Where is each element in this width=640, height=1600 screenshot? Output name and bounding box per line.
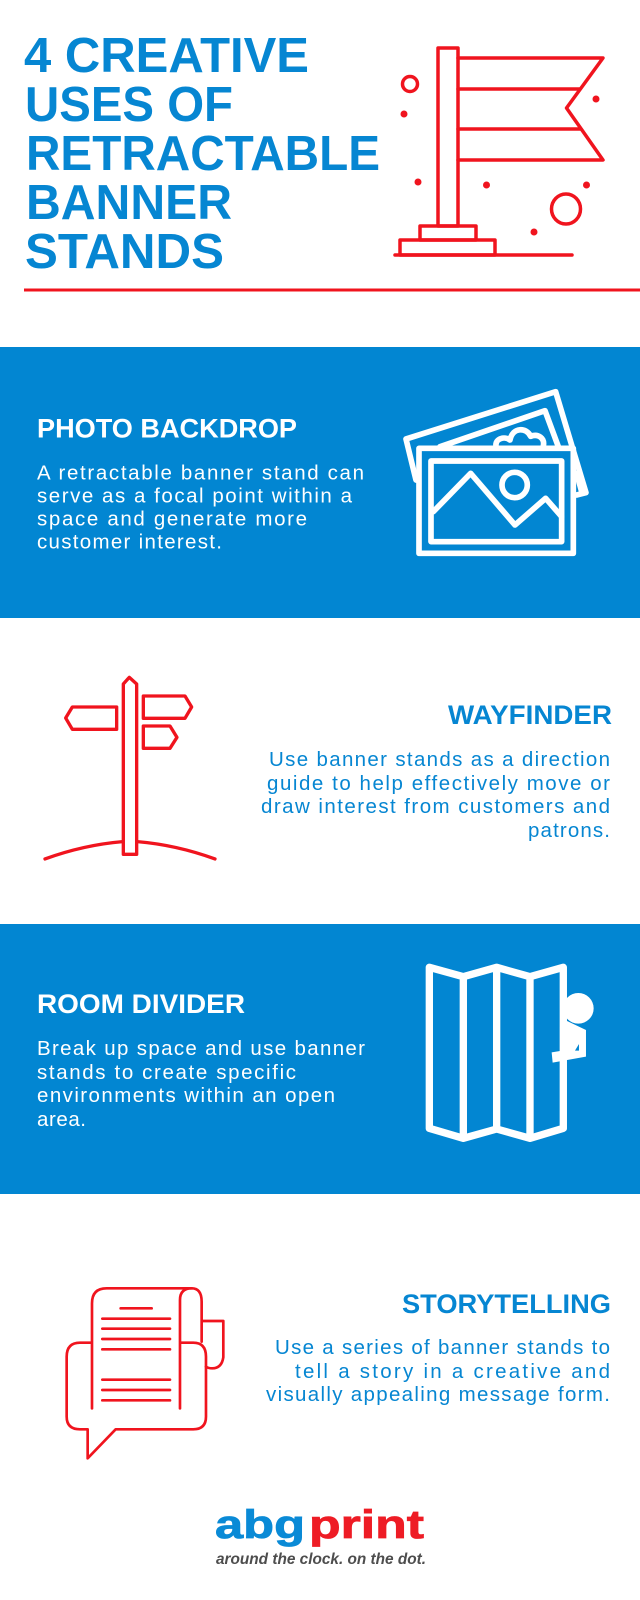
logo tagline: around the clock. on the dot. (216, 1551, 426, 1568)
text: wayfinder description: draw interest from customers and (261, 795, 610, 818)
icon: folding screen with person (429, 967, 594, 1138)
heading: storytelling: STORYTELLING (402, 1289, 611, 1319)
text: wayfinder description: patrons. (528, 819, 610, 842)
panel: room divider (0, 924, 640, 1194)
title: USES OF (25, 78, 233, 132)
logo: abgprint (215, 1503, 426, 1568)
logo: abgprint: abg (215, 1503, 305, 1547)
heading: wayfinder: WAYFINDER (448, 700, 612, 730)
red divider line (24, 288, 640, 292)
heading: photo backdrop: PHOTO BACKDROP (37, 414, 297, 444)
logo: abgprint: print (309, 1503, 424, 1547)
panel: photo backdrop (0, 347, 640, 618)
title: RETRACTABLE (26, 127, 380, 181)
text: room divider description: environments within an open (37, 1084, 335, 1107)
text: storytelling description: Use a series of banner stands to (275, 1336, 610, 1359)
text: photo backdrop description: space and generate more (37, 508, 307, 530)
icon: red scroll in speech bubble (67, 1288, 223, 1458)
text: storytelling description: tell a story in a creative and (295, 1360, 610, 1383)
text: storytelling description (266, 1336, 610, 1406)
text: room divider description (37, 1037, 365, 1131)
text: wayfinder description: guide to help effectively move or (267, 772, 610, 795)
text: room divider description: Break up space and use banner (37, 1037, 365, 1060)
text: room divider description: area. (37, 1108, 86, 1131)
heading: room divider: ROOM DIVIDER (37, 989, 245, 1019)
title: BANNER (26, 176, 232, 230)
title: 4 CREATIVE (24, 29, 309, 83)
icon: stacked photos (406, 392, 586, 553)
text: room divider description: stands to create specific (37, 1061, 296, 1084)
text: wayfinder description (261, 748, 610, 842)
text: photo backdrop description: customer interest. (37, 530, 222, 554)
text: photo backdrop description (37, 462, 364, 554)
text: wayfinder description: Use banner stands as a direction (269, 748, 610, 771)
icon: red flag on stand (395, 48, 603, 255)
title: STANDS (25, 225, 224, 279)
text: photo backdrop description: serve as a focal point within a (37, 484, 353, 508)
icon: red signpost (45, 677, 215, 859)
text: storytelling description: visually appealing message form. (266, 1383, 610, 1406)
title (24, 29, 380, 279)
text: photo backdrop description: A retractable banner stand can (37, 462, 364, 484)
